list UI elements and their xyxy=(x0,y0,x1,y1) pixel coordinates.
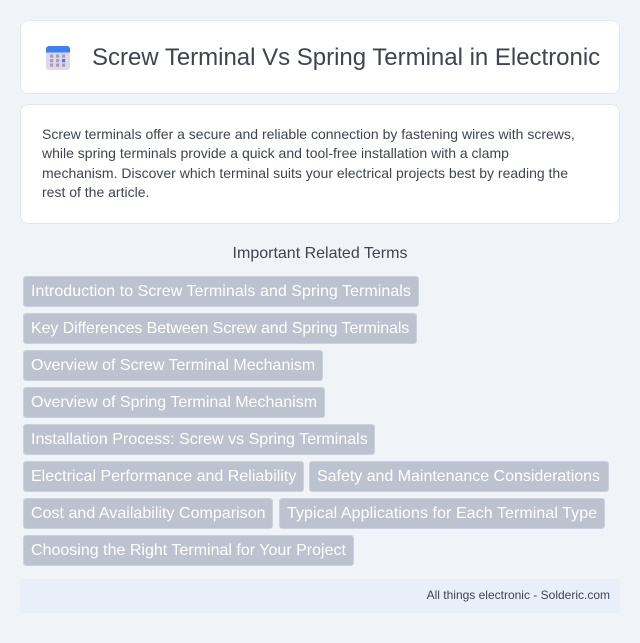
panel: title card xyxy=(20,20,620,94)
tag: key differences: Key Differences Between Screw and Spring Terminals xyxy=(31,320,409,337)
tag: applications xyxy=(279,498,605,529)
footer: All things electronic - Solderic.com xyxy=(427,588,610,602)
tag: applications: Typical Applications for Each Terminal Type xyxy=(287,505,597,522)
heading: related terms: Important Related Terms xyxy=(233,245,407,262)
tag: introduction: Introduction to Screw Terminals and Spring Terminals xyxy=(31,283,411,300)
footer xyxy=(20,579,620,613)
text: line 3: mechanism. Discover which terminal suits your electrical projects best by reading the xyxy=(42,165,568,181)
tag: cost xyxy=(23,498,273,529)
text: line 4: rest of the article. xyxy=(42,184,149,200)
tag: electrical performance: Electrical Performance and Reliability xyxy=(31,468,296,485)
tag: choosing xyxy=(23,535,354,566)
text: line 2: while spring terminals provide a quick and tool-free installation with a clamp xyxy=(42,145,509,161)
title: Screw Terminal Vs Spring Terminal in Electronic xyxy=(92,44,600,71)
tag: cost: Cost and Availability Comparison xyxy=(31,505,266,522)
tag: safety xyxy=(309,461,609,492)
tag: installation: Installation Process: Screw vs Spring Terminals xyxy=(31,431,368,448)
tag: screw mechanism xyxy=(23,350,323,381)
text: line 1: Screw terminals offer a secure and reliable connection by fastening wires with screws, xyxy=(42,126,575,142)
tag: introduction xyxy=(23,276,419,307)
tag: safety: Safety and Maintenance Considerations xyxy=(317,468,600,485)
panel: intro text xyxy=(20,104,620,224)
tag: electrical performance xyxy=(23,461,304,492)
tag: spring mechanism xyxy=(23,387,325,418)
tag: key differences xyxy=(23,313,417,344)
tag: spring mechanism: Overview of Spring Terminal Mechanism xyxy=(31,394,317,411)
tag: installation xyxy=(23,424,375,455)
icon: calendar xyxy=(46,46,70,70)
tag: choosing: Choosing the Right Terminal for Your Project xyxy=(31,542,346,559)
tag: screw mechanism: Overview of Screw Terminal Mechanism xyxy=(31,357,315,374)
